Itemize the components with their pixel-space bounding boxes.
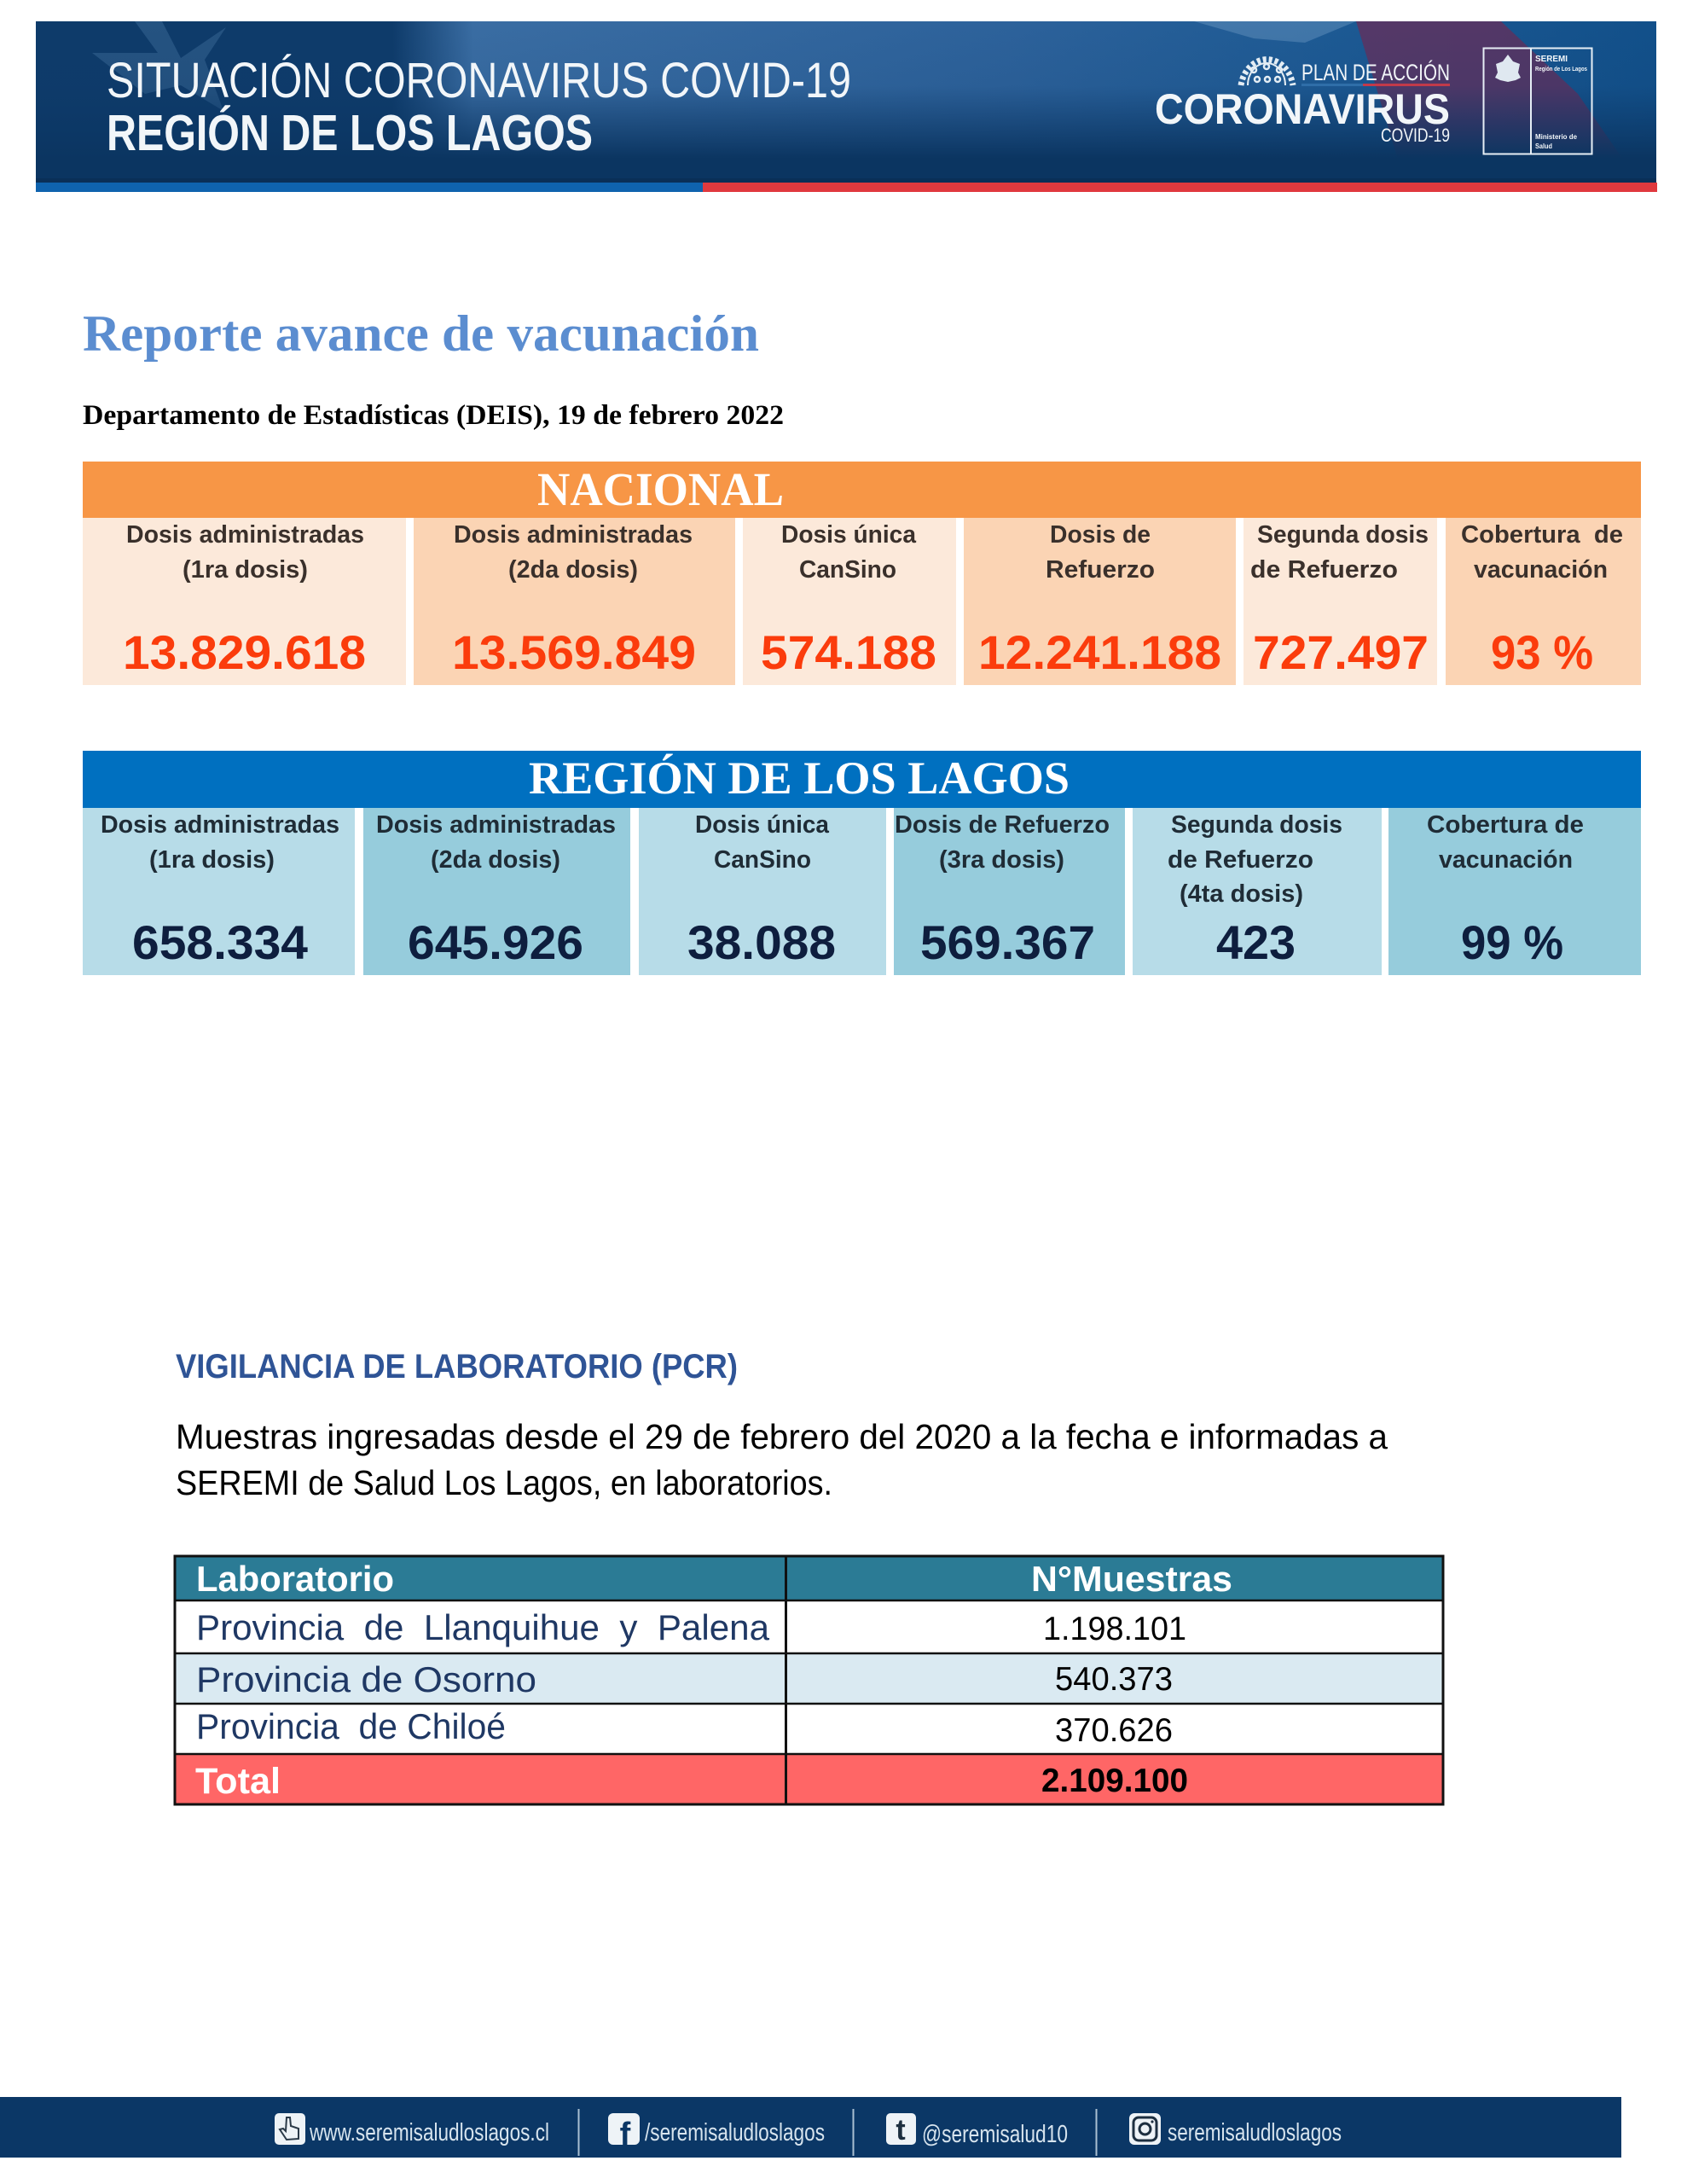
card: nacional primera dosis: [83, 518, 406, 685]
panel: nacional: [83, 462, 1641, 685]
card: region refuerzo: 569.367: [920, 915, 1095, 969]
table header row: Laboratorio: [196, 1559, 394, 1599]
card: region primera dosis: (1ra dosis): [149, 846, 275, 874]
salud text: Salud: [1535, 142, 1552, 150]
coronavirus wordmark: CORONAVIRUS: [1155, 85, 1450, 133]
card: nacional refuerzo: [964, 518, 1236, 685]
card: region segundo refuerzo: (4ta dosis): [1180, 880, 1303, 908]
icon: coat of arms: [1495, 55, 1521, 82]
card: region cobertura: [1388, 808, 1641, 975]
header banner: [36, 21, 1657, 192]
table: laboratorio muestras: [175, 1556, 1443, 1804]
region header bar: [83, 751, 1641, 808]
card: region primera dosis: [83, 808, 355, 975]
card: nacional segundo refuerzo: 727.497: [1253, 625, 1429, 679]
ministerio text: Ministerio de: [1535, 132, 1577, 141]
card: nacional refuerzo: Dosis de: [1050, 521, 1151, 549]
header title line 2: REGIÓN DE LOS LAGOS: [107, 105, 593, 161]
card: nacional dosis unica: 574.188: [761, 625, 936, 679]
row: chiloe: 370.626: [1055, 1712, 1173, 1749]
card: region segunda dosis: [363, 808, 630, 975]
card: nacional cobertura: 93 %: [1491, 625, 1593, 679]
card: nacional segundo refuerzo: [1244, 518, 1437, 685]
card: nacional refuerzo: 12.241.188: [978, 625, 1221, 679]
icon: facebook: f: [620, 2117, 631, 2152]
flag fold decoration: [1356, 21, 1625, 162]
nacional heading: NACIONAL: [537, 463, 784, 515]
card: nacional segunda dosis: Dosis administradas: [454, 521, 693, 549]
card: region refuerzo: [894, 808, 1125, 975]
icon: tumblr: [886, 2113, 916, 2146]
row: osorno: [176, 1653, 1443, 1704]
panel: region de los lagos: [83, 751, 1641, 975]
tumblr handle: @seremisalud10: [922, 2121, 1068, 2148]
row: chiloe: Provincia de Chiloé: [196, 1706, 506, 1746]
card: region dosis unica: [639, 808, 886, 975]
card: region segundo refuerzo: Segunda dosis: [1171, 811, 1342, 839]
text block: muestras description: Muestras ingresadas desde el 29 de febrero del 2020 a la fecha e informadas a: [176, 1417, 1388, 1456]
row: llanquihue y palena: 1.198.101: [1043, 1611, 1186, 1647]
card: nacional segunda dosis: [414, 518, 735, 685]
seremi text: SEREMI: [1535, 54, 1568, 64]
card: region segunda dosis: (2da dosis): [431, 846, 560, 874]
card: nacional primera dosis: (1ra dosis): [183, 556, 308, 584]
card: nacional cobertura: [1446, 518, 1641, 685]
facebook handle: /seremisaludloslagos: [645, 2119, 825, 2146]
header title line 1: SITUACIÓN CORONAVIRUS COVID-19: [107, 53, 851, 108]
icon: pointer hand: [275, 2113, 305, 2145]
covid-19 label: COVID-19: [1381, 125, 1450, 146]
icon: facebook: [608, 2113, 640, 2152]
table header row: [176, 1556, 1443, 1600]
row: osorno: Provincia de Osorno: [196, 1659, 536, 1699]
card: region segunda dosis: 645.926: [408, 915, 583, 969]
plan underline: [1301, 84, 1450, 86]
card: region primera dosis: Dosis administradas: [101, 811, 339, 839]
row: chiloe: [176, 1704, 1443, 1754]
card: region refuerzo: Dosis de Refuerzo: [895, 811, 1110, 839]
card: region segundo refuerzo: de Refuerzo: [1168, 846, 1313, 874]
heading: reporte avance de vacunacion: Reporte avance de vacunación: [83, 305, 759, 362]
row: total: Total: [195, 1761, 281, 1802]
card: nacional dosis unica: CanSino: [799, 556, 896, 584]
card: region cobertura: 99 %: [1461, 915, 1563, 969]
card: region dosis unica: CanSino: [714, 846, 811, 874]
card: region segundo refuerzo: [1133, 808, 1382, 975]
table header row: N°Muestras: [1031, 1559, 1232, 1599]
card: region segundo refuerzo: 423: [1216, 915, 1296, 969]
card: region segunda dosis: Dosis administradas: [376, 811, 616, 839]
row: llanquihue y palena: [176, 1600, 1443, 1653]
icon: instagram: [1129, 2113, 1161, 2145]
header bar blue: [36, 183, 703, 192]
card: nacional cobertura: Cobertura de: [1461, 521, 1623, 549]
plan de accion label: PLAN DE ACCIÓN: [1301, 59, 1450, 85]
nacional header bar: [83, 462, 1641, 518]
text block: muestras description: [176, 1417, 1388, 1502]
card: region cobertura: vacunación: [1439, 846, 1573, 874]
seremi logo box: [1484, 48, 1591, 154]
card: nacional segunda dosis: 13.569.849: [452, 625, 696, 679]
card: nacional dosis unica: [743, 518, 956, 685]
region text: Región de Los Lagos: [1535, 65, 1587, 73]
row: llanquihue y palena: Provincia de Llanquihue y Palena: [196, 1607, 770, 1647]
subheading: source and date: Departamento de Estadísticas (DEIS), 19 de febrero 2022: [83, 400, 784, 431]
row: total: 2.109.100: [1041, 1763, 1188, 1799]
heading: vigilancia de laboratorio: VIGILANCIA DE LABORATORIO (PCR): [176, 1348, 738, 1385]
card: nacional segunda dosis: (2da dosis): [508, 556, 638, 584]
text block: muestras description: SEREMI de Salud Los Lagos, en laboratorios.: [176, 1463, 832, 1502]
website link: www.seremisaludloslagos.cl: [309, 2119, 549, 2146]
card: nacional primera dosis: 13.829.618: [123, 625, 366, 679]
header bar red: [703, 183, 1657, 192]
card: region cobertura: Cobertura de: [1427, 811, 1584, 839]
row: total: [176, 1754, 1443, 1804]
row: osorno: 540.373: [1055, 1661, 1173, 1698]
card: region dosis unica: 38.088: [687, 915, 836, 969]
card: nacional dosis unica: Dosis única: [781, 521, 917, 549]
card: nacional refuerzo: Refuerzo: [1046, 556, 1155, 584]
card: region primera dosis: 658.334: [132, 915, 308, 969]
card: nacional segundo refuerzo: de Refuerzo: [1250, 556, 1398, 584]
card: nacional segundo refuerzo: Segunda dosis: [1257, 521, 1429, 549]
card: nacional primera dosis: Dosis administradas: [126, 521, 364, 549]
region heading: REGIÓN DE LOS LAGOS: [529, 752, 1070, 804]
card: nacional cobertura: vacunación: [1474, 556, 1608, 584]
instagram handle: seremisaludloslagos: [1168, 2119, 1342, 2146]
card: region dosis unica: Dosis única: [695, 811, 830, 839]
flag star decoration: [92, 21, 226, 111]
icon: virus semicircle: [1241, 60, 1293, 85]
card: region refuerzo: (3ra dosis): [939, 846, 1064, 874]
icon: tumblr: t: [896, 2114, 906, 2146]
footer bar: [0, 2097, 1621, 2158]
